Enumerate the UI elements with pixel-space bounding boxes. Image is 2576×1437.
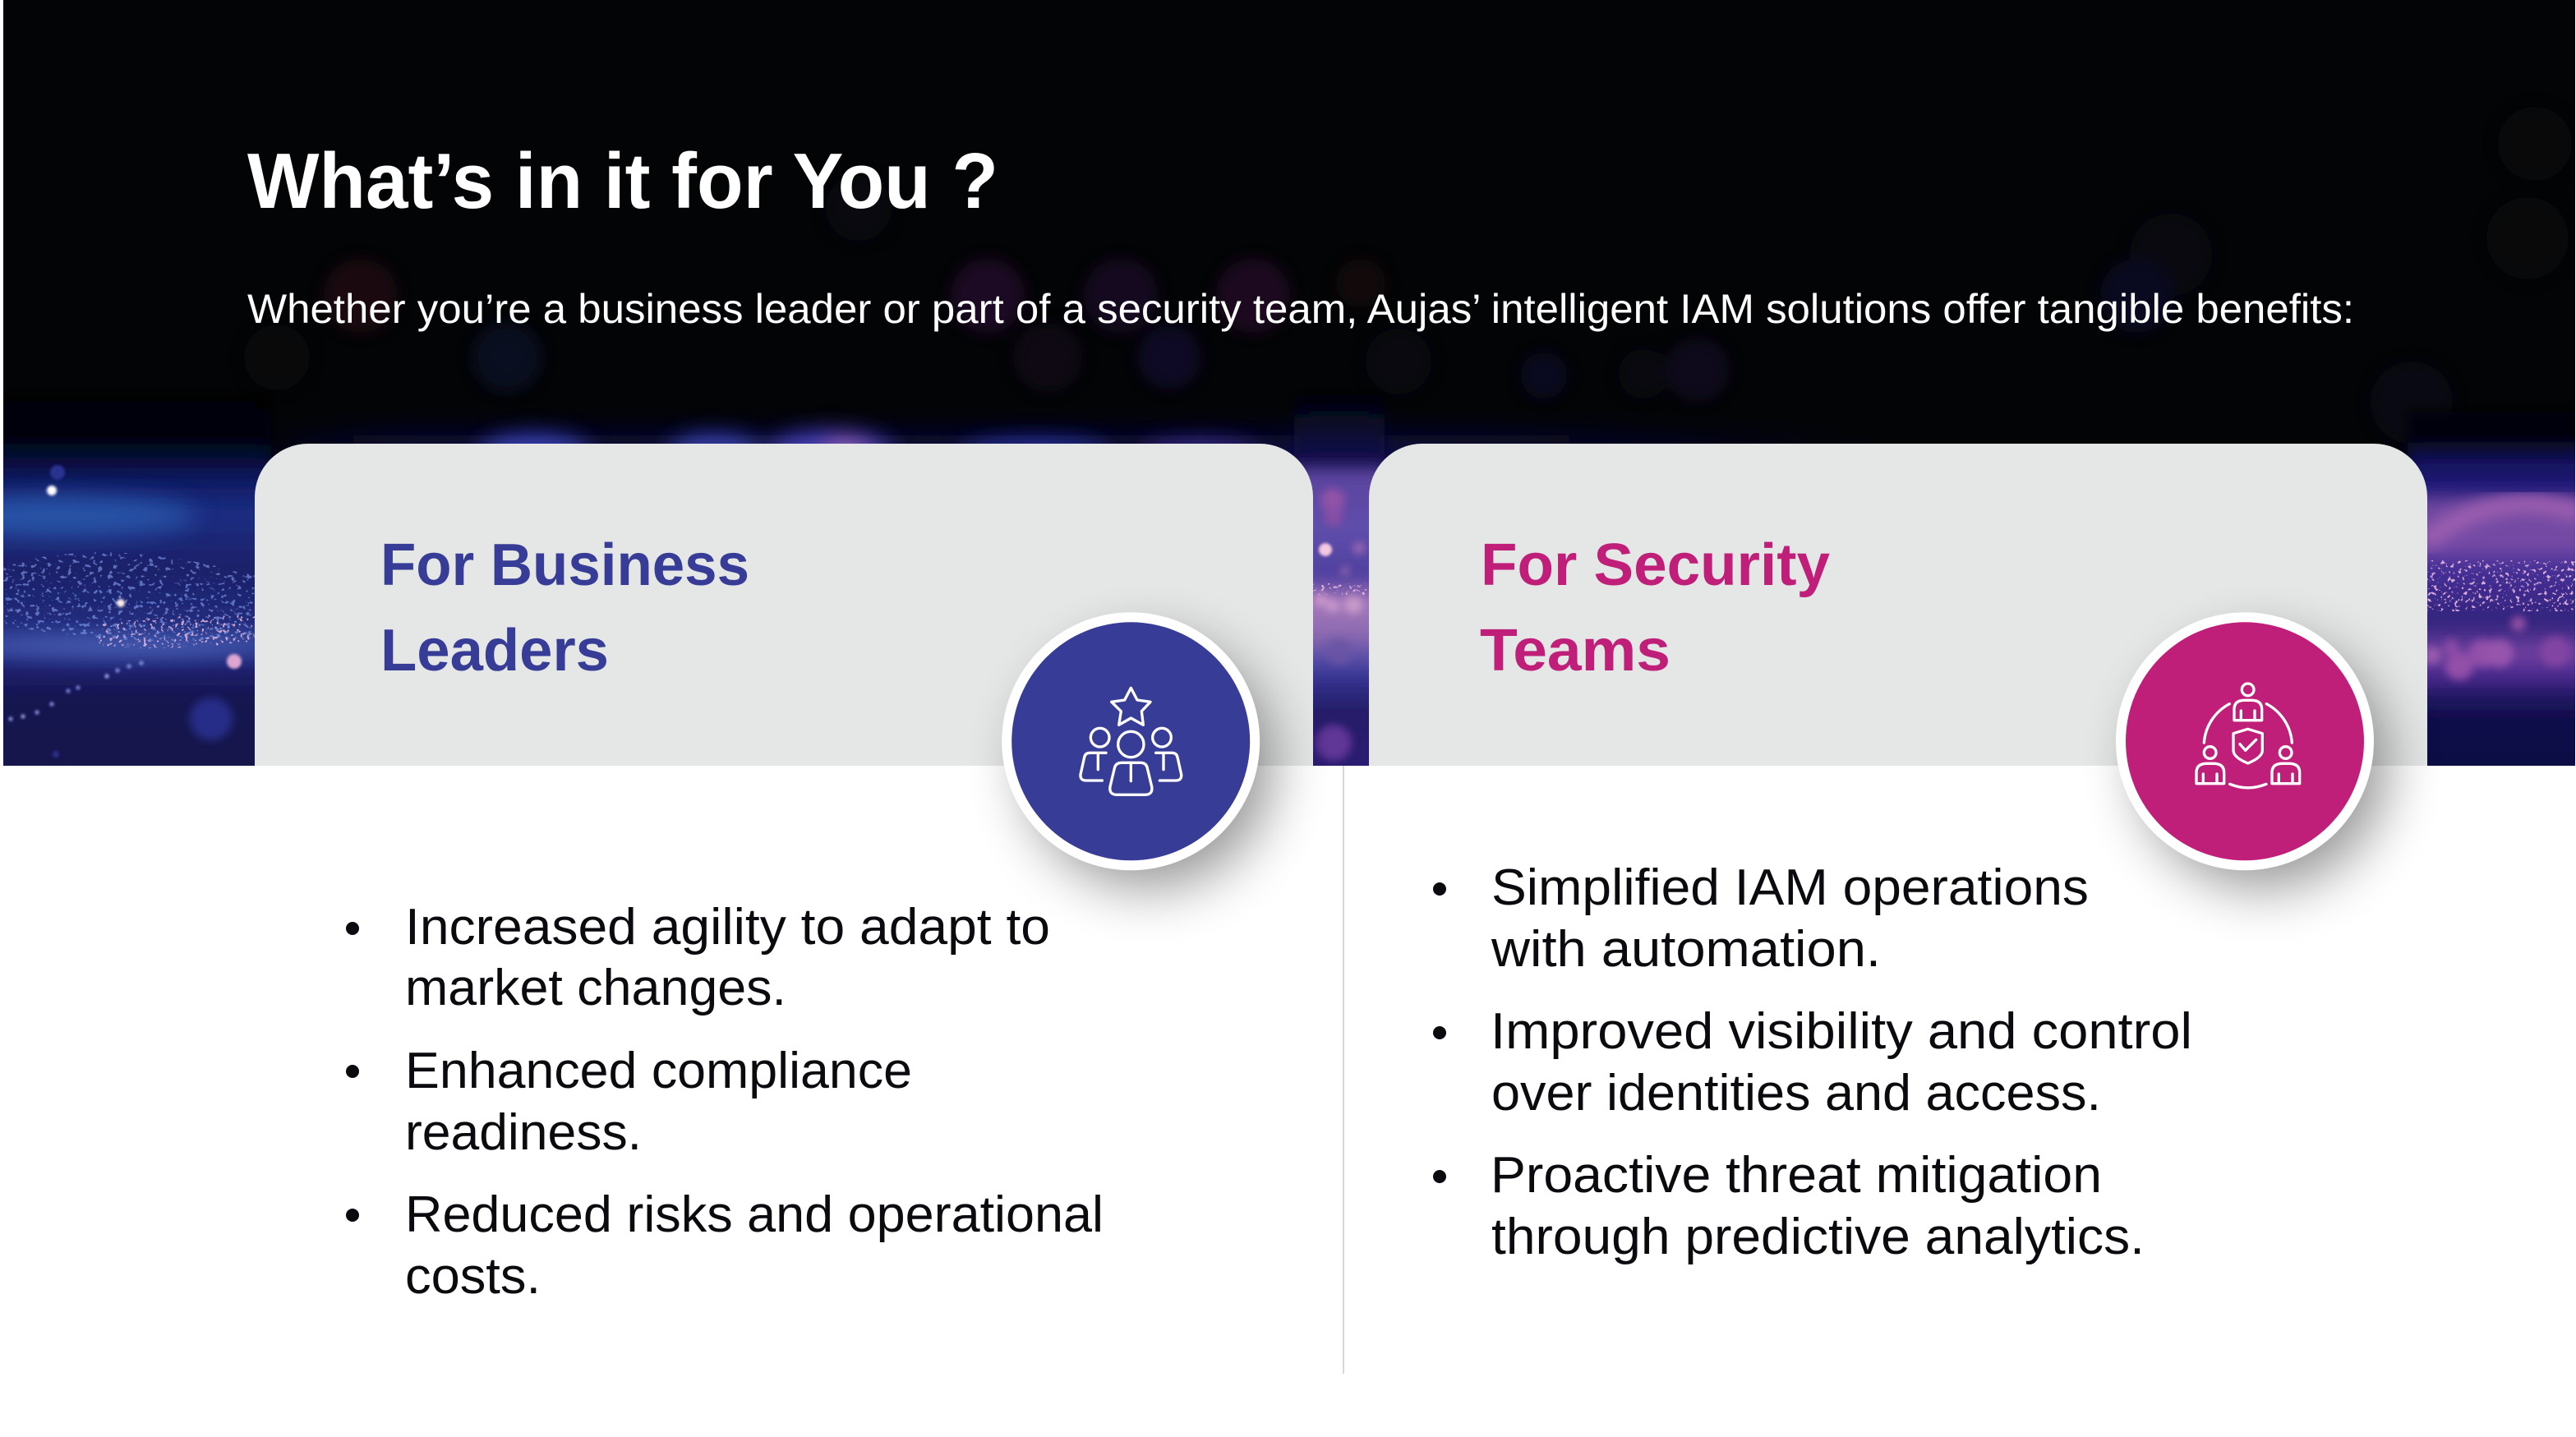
icon: team around shield (2196, 684, 2300, 788)
bullet: increased agility (346, 899, 1050, 1016)
heading: for business leaders (380, 532, 749, 684)
bullet: reduced risks: Reduced risks and operational (405, 1186, 1104, 1243)
bullet: enhanced compliance: readiness. (405, 1104, 642, 1161)
title: What’s in it for You ? (247, 137, 998, 225)
bullet: simplified operations: with automation. (1491, 921, 1881, 978)
heading: for business leaders: Leaders (380, 618, 609, 684)
bullet: reduced risks (346, 1186, 1104, 1305)
icon: team with star (1081, 688, 1182, 794)
bullet: improved visibility (1433, 1003, 2192, 1122)
bullet: proactive mitigation (1433, 1147, 2145, 1265)
heading: for security teams (1480, 532, 1830, 684)
panel: for security teams card (1369, 444, 2427, 766)
bullet: enhanced compliance: Enhanced compliance (405, 1043, 912, 1099)
panel: dark particle background image (0, 0, 2576, 781)
icon badge: security teams (2116, 612, 2386, 887)
bullet: improved visibility: over identities and access. (1491, 1065, 2101, 1122)
bullet: proactive mitigation: through predictive analytics. (1491, 1209, 2145, 1265)
bullet: reduced risks: costs. (405, 1248, 541, 1305)
divider line between columns (1343, 766, 1344, 1374)
heading: for security teams: Teams (1480, 618, 1670, 684)
panel: for business leaders card (255, 444, 1313, 766)
heading: for business leaders: For Business (380, 532, 749, 598)
bullet: enhanced compliance (346, 1043, 912, 1161)
bullet: proactive mitigation: Proactive threat mitigation (1491, 1147, 2102, 1204)
bullet: increased agility: Increased agility to adapt to (405, 899, 1050, 956)
icon badge: business leaders (1002, 612, 1272, 887)
bullet: simplified operations: Simplified IAM operations (1491, 859, 2089, 916)
list: business leader benefits (346, 899, 1104, 1305)
bullet: simplified operations (1433, 859, 2089, 978)
list: security team benefits (1433, 859, 2192, 1265)
bullet: improved visibility: Improved visibility and control (1491, 1003, 2192, 1060)
subtitle: Whether you’re a business leader or part of a security team, Aujas’ intelligent IAM solutions offer tangible benefits: (247, 286, 2354, 332)
heading: for security teams: For Security (1481, 532, 1830, 598)
bullet: increased agility: market changes. (405, 960, 786, 1016)
